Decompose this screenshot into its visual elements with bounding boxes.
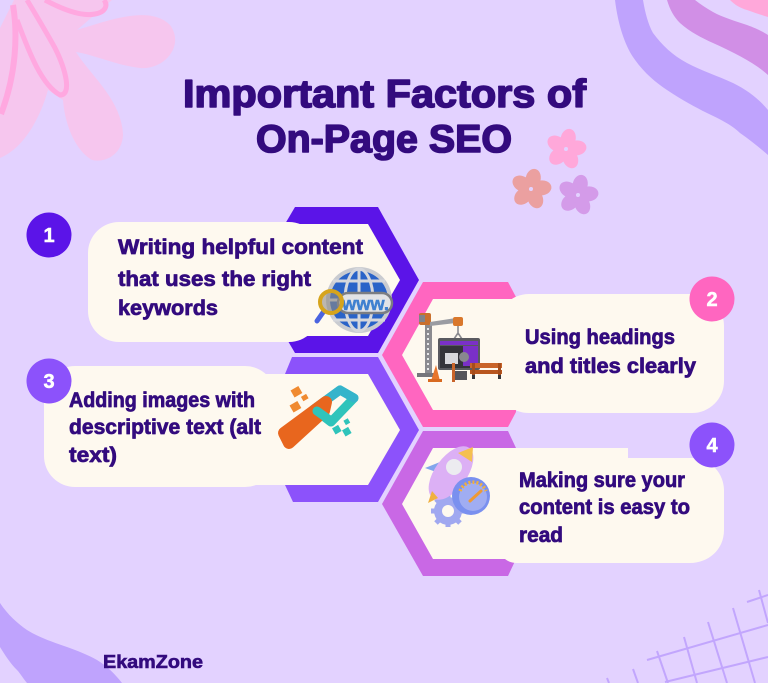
icon: chain link [284, 386, 354, 443]
badge 3: 3 [43, 371, 55, 393]
badge 3 [26, 358, 72, 404]
flower salmon [505, 164, 557, 214]
decorative grid bottom right [607, 590, 768, 683]
badge 4: 4 [706, 435, 718, 457]
badge 1 [26, 212, 72, 258]
title: On-Page SEO [256, 118, 512, 161]
decorative flowers [505, 124, 604, 220]
gear [431, 495, 465, 527]
text: factor 2 [525, 326, 696, 378]
badge 1: 1 [43, 225, 55, 247]
decorative waves top right [615, 0, 768, 155]
text: factor 2: and titles clearly [525, 355, 696, 378]
badge 2 [690, 276, 734, 322]
decorative wave bottom left [0, 603, 122, 683]
text: factor 1: keywords [118, 297, 218, 320]
badge 2: 2 [706, 289, 718, 311]
text: factor 1: Writing helpful content [118, 236, 363, 259]
decorative flower top left [0, 0, 175, 161]
panel: factor 3 [26, 357, 419, 502]
text: factor 3: text) [69, 444, 117, 467]
text: factor 3: descriptive text (alt [69, 416, 261, 439]
text: factor 3: Adding images with [69, 389, 255, 412]
text: factor 4 [519, 469, 690, 547]
text: factor 1 [118, 236, 363, 320]
flower purple [552, 170, 604, 220]
text: factor 4: read [519, 524, 563, 547]
icon: rocket, gear and gauge [420, 439, 490, 527]
icon: globe with www and magnifier: www. [341, 294, 389, 314]
icon: globe with www and magnifier [317, 267, 392, 333]
icon: crane building a web page [417, 313, 502, 382]
text: factor 2: Using headings [525, 326, 675, 349]
panel: factor 2 [382, 276, 734, 427]
title: Important Factors of [183, 73, 587, 116]
text: factor 1: that uses the right [118, 268, 311, 291]
badge 4 [690, 422, 734, 468]
text: factor 4: Making sure your [519, 469, 685, 492]
text: factor 3 [69, 389, 261, 467]
text: factor 4: content is easy to [519, 496, 690, 519]
brand name: EkamZone [103, 652, 203, 672]
panel: factor 4 [382, 422, 734, 576]
panel: factor 1 [26, 207, 419, 353]
title [183, 73, 587, 161]
flower pink [540, 124, 592, 174]
